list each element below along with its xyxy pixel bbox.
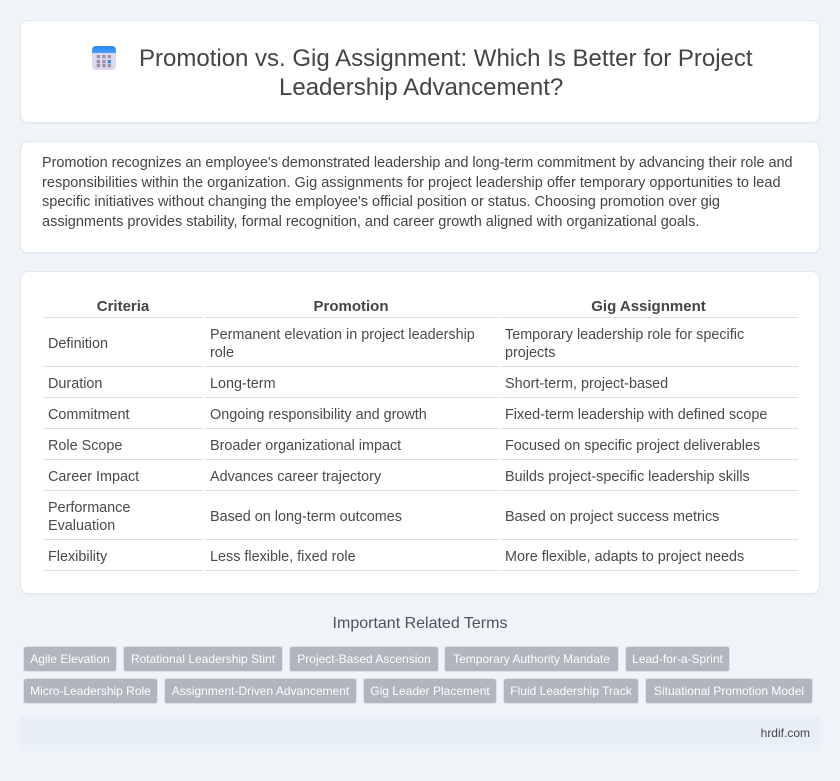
footer bar xyxy=(20,717,820,751)
row: duration: Short-term, project-based xyxy=(505,376,668,392)
related terms tags: Micro-Leadership Role xyxy=(30,684,151,698)
intro paragraph: responsibilities within the organization. Gig assignments for project leadership offer temporary opportunities to lead xyxy=(42,175,781,191)
table header: Promotion xyxy=(314,298,388,315)
table header xyxy=(97,298,706,315)
row: career impact: Builds project-specific leadership skills xyxy=(505,469,750,485)
related terms tags: Gig Leader Placement xyxy=(370,684,490,698)
title xyxy=(139,45,753,101)
row: definition: projects xyxy=(505,345,555,361)
row: role scope: Focused on specific project deliverables xyxy=(505,438,760,454)
table header: Gig Assignment xyxy=(591,298,706,315)
row: role scope: Role Scope xyxy=(48,438,122,454)
row: flexibility xyxy=(48,549,744,565)
related terms tags: Assignment-Driven Advancement xyxy=(172,684,349,698)
related terms tags: Fluid Leadership Track xyxy=(510,684,632,698)
row: performance evaluation: Performance xyxy=(48,500,130,516)
header panel: Leadership Advancement? xyxy=(279,74,563,101)
comparison table panel xyxy=(20,271,820,594)
row: performance evaluation: Based on long-term outcomes xyxy=(210,509,402,525)
row: duration: Duration xyxy=(48,376,102,392)
intro text panel xyxy=(20,141,820,253)
row: flexibility: Flexibility xyxy=(48,549,107,565)
row: career impact xyxy=(48,469,750,485)
row: duration: Long-term xyxy=(210,376,276,392)
row: definition: Permanent elevation in project leadership xyxy=(210,327,475,343)
row: definition: Temporary leadership role for specific xyxy=(505,327,744,343)
row: definition: role xyxy=(210,345,234,361)
intro paragraph xyxy=(42,155,793,230)
related terms tags: Lead-for-a-Sprint xyxy=(632,652,723,666)
heading: important related terms: Important Related Terms xyxy=(333,615,507,632)
row: definition: Definition xyxy=(48,336,108,352)
intro paragraph: Promotion recognizes an employee's demonstrated leadership and long-term commitment by advancing their role and xyxy=(42,155,793,171)
related terms tags: Project-Based Ascension xyxy=(297,652,431,666)
row: commitment: Commitment xyxy=(48,407,130,423)
row: definition xyxy=(48,327,744,361)
row: role scope xyxy=(48,438,760,454)
row: role scope: Broader organizational impact xyxy=(210,438,401,454)
row: performance evaluation xyxy=(48,500,719,534)
related terms tags xyxy=(23,646,813,704)
row: commitment: Fixed-term leadership with defined scope xyxy=(505,407,767,423)
header panel: Promotion vs. Gig Assignment: Which Is Better for Project xyxy=(139,45,753,72)
row: flexibility: More flexible, adapts to project needs xyxy=(505,549,744,565)
icon: calendar xyxy=(92,46,116,70)
row: performance evaluation: Evaluation xyxy=(48,518,115,534)
related terms tags: Situational Promotion Model xyxy=(654,684,804,698)
intro paragraph: specific initiatives without changing the employee's official position or status. Choosing promotion over gig xyxy=(42,194,720,210)
row: performance evaluation: Based on project success metrics xyxy=(505,509,719,525)
row: duration xyxy=(48,376,668,392)
related terms tags: Rotational Leadership Stint xyxy=(131,652,275,666)
row: commitment xyxy=(48,407,767,423)
row: career impact: Advances career trajectory xyxy=(210,469,381,485)
related terms tags: Agile Elevation xyxy=(30,652,110,666)
related terms tags: Temporary Authority Mandate xyxy=(453,652,610,666)
table header: Criteria xyxy=(97,298,149,315)
footer source: hrdif.com xyxy=(761,726,810,740)
header panel xyxy=(20,20,820,123)
row: commitment: Ongoing responsibility and growth xyxy=(210,407,427,423)
intro paragraph: assignments provides stability, formal recognition, and career growth aligned with organizational goals. xyxy=(42,214,699,230)
row: career impact: Career Impact xyxy=(48,469,139,485)
row: flexibility: Less flexible, fixed role xyxy=(210,549,356,565)
